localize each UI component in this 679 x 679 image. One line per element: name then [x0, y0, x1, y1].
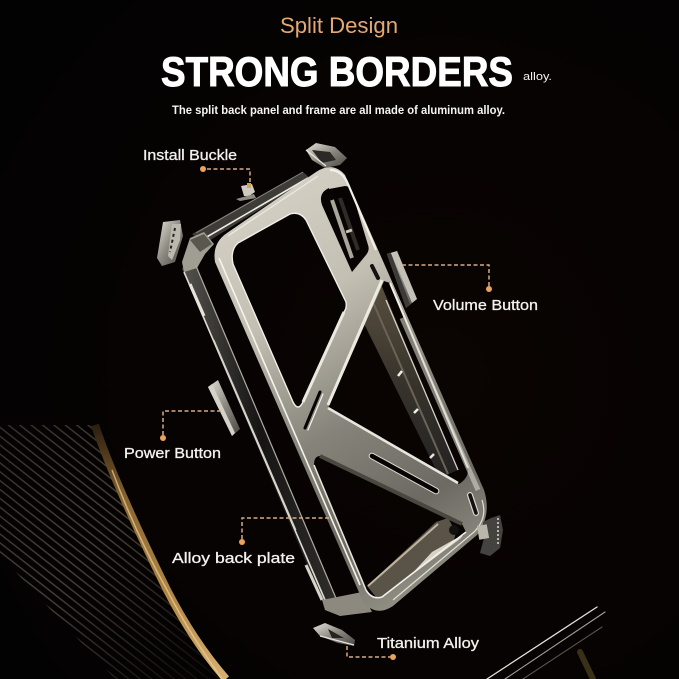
callout: alloy back plate: Alloy back plate — [172, 550, 295, 567]
title suffix: alloy. — [523, 71, 552, 83]
part: bottom titanium cap — [313, 623, 355, 646]
part: power button — [208, 380, 240, 436]
plate slots — [305, 266, 476, 513]
callout: volume button: Volume Button — [433, 297, 538, 314]
camera window details — [332, 198, 358, 258]
part: right screw — [477, 515, 503, 556]
callout: volume button — [402, 265, 538, 314]
part: left end cap — [157, 220, 183, 266]
callout: power button: Power Button — [124, 445, 221, 462]
callout: install buckle — [143, 147, 250, 184]
part: top screw cap — [306, 143, 347, 168]
decorative wave stripes — [0, 425, 219, 679]
eyebrow heading: Split Design — [280, 13, 398, 38]
main title: STRONG BORDERS — [161, 48, 513, 95]
gold curved band — [95, 425, 226, 679]
rear lower section — [367, 518, 456, 597]
callout: titanium alloy — [347, 635, 480, 660]
rear rail right — [345, 282, 458, 478]
phone frame exploded view — [157, 143, 503, 646]
callout: alloy back plate — [172, 518, 331, 567]
plate highlights — [219, 170, 484, 600]
decorative light lines bottom right — [487, 607, 605, 679]
front plate with cutouts — [214, 167, 487, 611]
callout: titanium alloy: Titanium Alloy — [377, 635, 480, 652]
subtitle: The split back panel and frame are all made of aluminum alloy. — [172, 105, 505, 117]
part: install buckle — [236, 183, 256, 201]
rear frame — [182, 172, 464, 616]
callout: install buckle: Install Buckle — [143, 147, 237, 164]
callout: power button — [124, 411, 221, 462]
part: volume button — [387, 251, 417, 308]
